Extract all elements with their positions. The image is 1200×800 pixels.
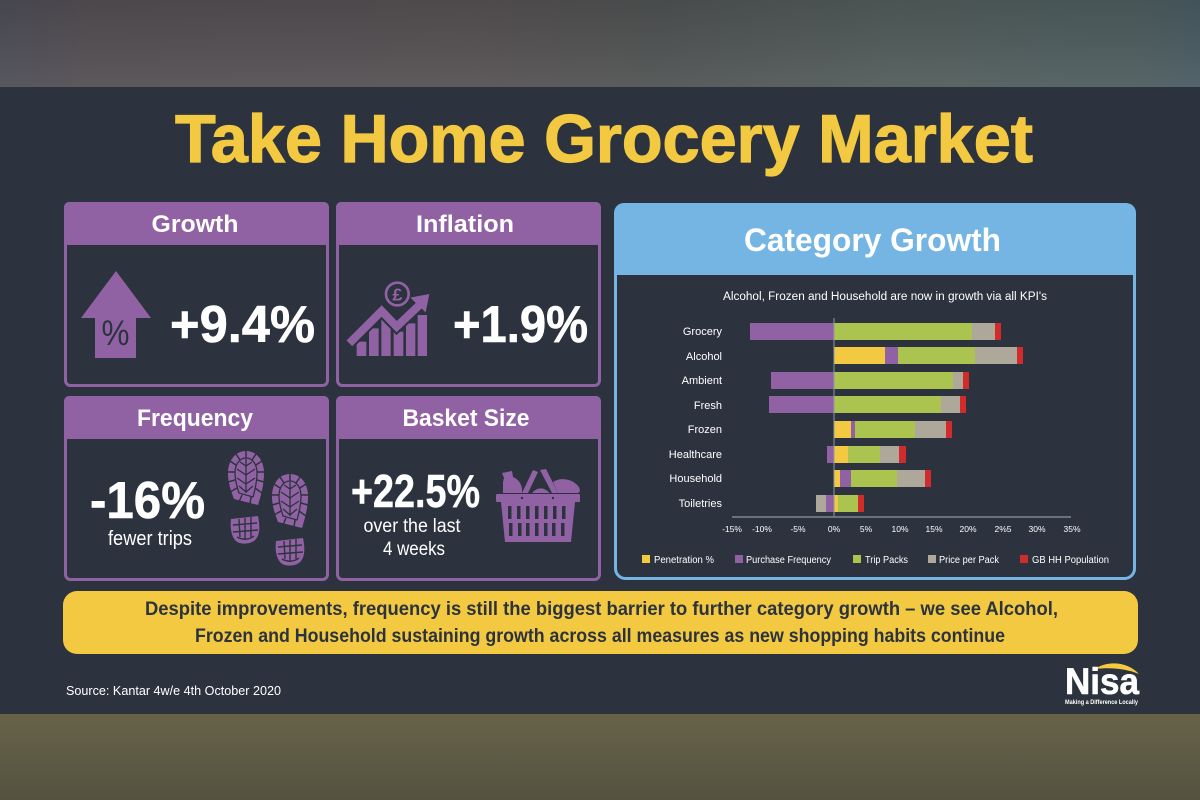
basket size heading: Basket Size <box>402 405 530 432</box>
row: toiletries: Toiletries <box>679 498 722 510</box>
row: frozen <box>688 421 952 438</box>
growth heading: Growth <box>152 211 238 238</box>
frequency note: fewer trips <box>108 528 192 550</box>
inflation value: +1.9% <box>453 296 588 354</box>
category growth heading: Category Growth <box>744 222 1001 258</box>
stacked bar chart <box>669 318 1081 534</box>
frequency value: -16% <box>90 472 205 530</box>
icon: percent up arrow <box>81 271 151 358</box>
x axis labels: 30% <box>1028 524 1046 534</box>
row: toiletries <box>679 495 864 512</box>
x axis labels: -10% <box>752 524 772 534</box>
row: alcohol: Alcohol <box>686 351 722 363</box>
row: household: Household <box>669 473 722 485</box>
callout banner: Despite improvements, frequency is still the biggest barrier to further category growth – we see Alcohol, <box>145 599 1058 620</box>
icon: left footprint <box>228 451 264 544</box>
icon: right footprint <box>272 474 308 566</box>
chart legend: Penetration % <box>654 555 714 566</box>
inflation header <box>336 202 601 245</box>
x axis labels: -5% <box>790 524 806 534</box>
x axis labels: 35% <box>1063 524 1081 534</box>
row: grocery <box>683 323 1001 340</box>
growth header <box>64 202 329 245</box>
x axis labels: 20% <box>959 524 977 534</box>
callout banner <box>63 591 1138 654</box>
chart legend: Purchase Frequency <box>746 555 831 566</box>
x axis labels: 0% <box>828 524 841 534</box>
logo: Nisa: Making a Difference Locally <box>1065 699 1138 706</box>
category growth header <box>614 203 1136 275</box>
x axis labels: 2%5 <box>994 524 1012 534</box>
x axis labels: 10% <box>891 524 909 534</box>
row: ambient <box>682 372 969 389</box>
x axis labels: 15% <box>925 524 943 534</box>
basket size value: +22.5% <box>351 465 480 517</box>
row: fresh <box>694 396 966 413</box>
chart legend: Trip Packs <box>865 555 908 566</box>
source note: Source: Kantar 4w/e 4th October 2020 <box>66 684 281 698</box>
frequency heading: Frequency <box>137 405 254 432</box>
frequency header <box>64 396 329 439</box>
basket size note line two: 4 weeks <box>383 539 445 560</box>
x axis labels: 5% <box>860 524 873 534</box>
callout banner: Frozen and Household sustaining growth across all measures as new shopping habits continue <box>195 626 1005 647</box>
chart legend: Price per Pack <box>939 555 1000 566</box>
inflation heading: Inflation <box>416 211 514 238</box>
chart legend <box>642 555 1109 566</box>
panel: growth <box>64 202 329 386</box>
chart subtitle: Alcohol, Frozen and Household are now in growth via all KPI's <box>723 291 1047 303</box>
icon: shopping basket <box>496 469 580 542</box>
row: frozen: Frozen <box>688 424 722 436</box>
panel: basket size <box>336 396 601 580</box>
row: healthcare: Healthcare <box>669 449 722 461</box>
chart legend: GB HH Population <box>1032 555 1109 566</box>
panel: inflation <box>336 202 601 386</box>
panel: frequency <box>64 396 329 580</box>
bottom photo band <box>0 714 1200 800</box>
basket size note: over the last <box>364 516 461 537</box>
title: Take Home Grocery Market <box>175 101 1033 177</box>
top photo band <box>0 0 1200 87</box>
row: household <box>669 470 931 487</box>
row: healthcare <box>669 446 906 463</box>
x axis labels <box>722 524 1081 534</box>
row: ambient: Ambient <box>682 375 722 387</box>
icon: percent up arrow: % <box>102 314 130 353</box>
logo: Nisa: Nisa <box>1065 661 1139 702</box>
x axis labels: -15% <box>722 524 742 534</box>
row: fresh: Fresh <box>694 400 722 412</box>
growth value: +9.4% <box>170 296 315 354</box>
icon: rising chart with pound coin: £ <box>392 285 402 305</box>
row: grocery: Grocery <box>683 326 722 338</box>
row: alcohol <box>686 347 1023 364</box>
basket size header <box>336 396 601 439</box>
panel: category growth <box>614 203 1136 578</box>
icon: rising chart with pound coin <box>349 283 429 356</box>
